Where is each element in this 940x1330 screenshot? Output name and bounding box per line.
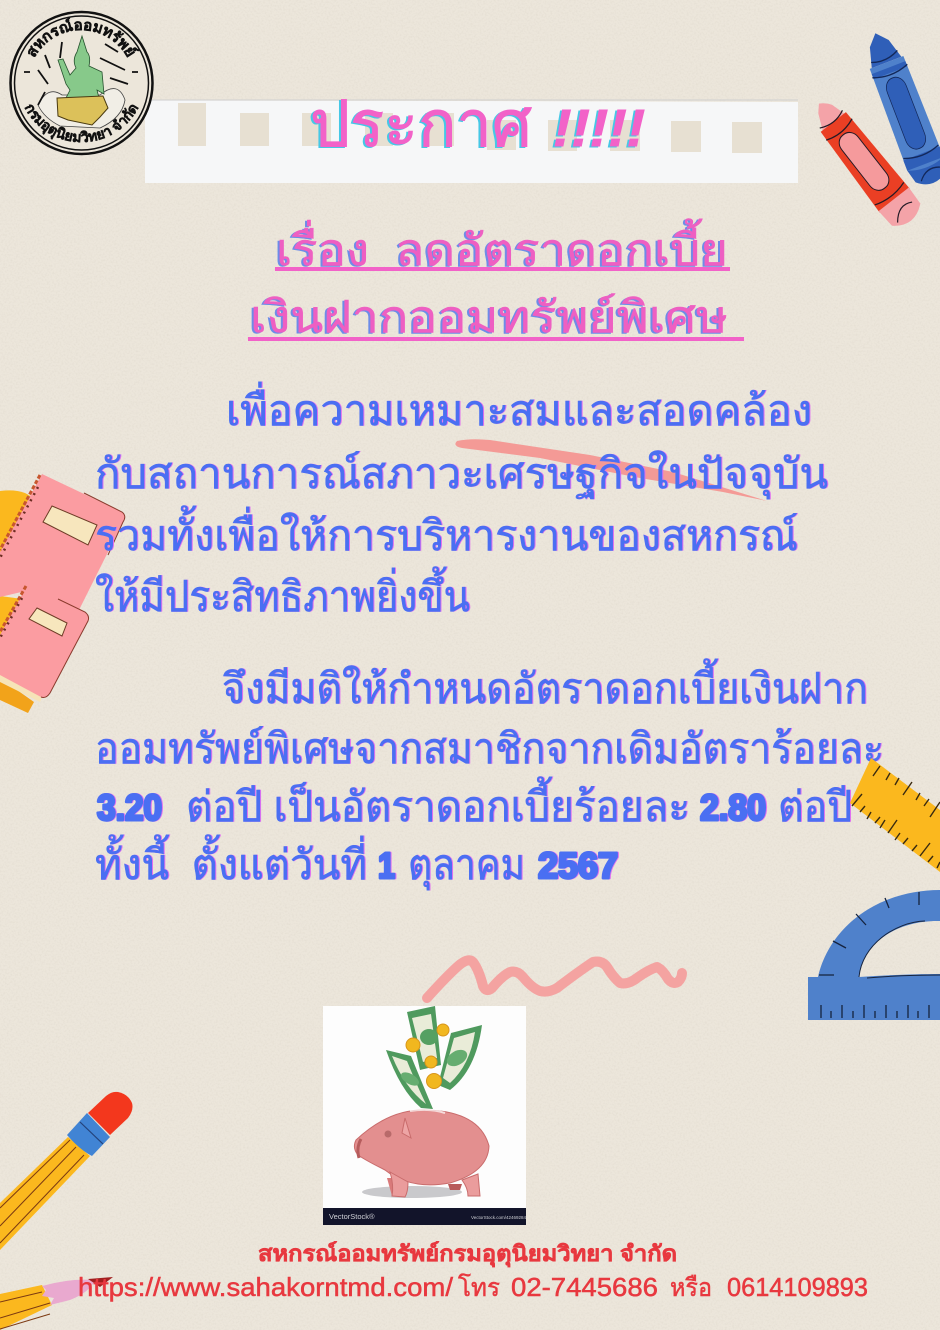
paragraph 1: เพื่อความเหมาะสมและสอดคล้อง (226, 382, 812, 434)
subtitle line 2: เงินฝากออมทรัพย์พิเศษ (250, 293, 728, 342)
piggy bank picture (323, 1006, 527, 1225)
footer contact: 0614109893 (727, 1272, 868, 1302)
title: ประกาศ (310, 88, 532, 160)
icon: red crayon (804, 92, 926, 233)
paragraph 2: 1 (378, 845, 395, 886)
footer contact: 02-7445686 (511, 1272, 658, 1302)
pig (354, 1110, 489, 1198)
logo figure (24, 36, 138, 128)
footer contact (78, 1241, 868, 1302)
coins (406, 1024, 449, 1088)
paragraph 1 (95, 382, 828, 620)
icon: yellow ruler (850, 758, 940, 872)
watermark bar: VectorStock® (329, 1212, 375, 1221)
footer contact: https://www.sahakorntmd.com/ (78, 1272, 454, 1302)
paragraph 2: จึงมีมติให้กำหนดอัตราดอกเบี้ยเงินฝาก (222, 658, 868, 712)
footer contact: โทร (458, 1273, 500, 1302)
icon: pink brush stroke behind text (455, 439, 767, 501)
paragraph 2: ต่อปี เป็นอัตราดอกเบี้ยร้อยละ (186, 776, 690, 830)
paragraph 2: ตุลาคม (408, 841, 525, 891)
title (310, 88, 645, 160)
torn white paper strip (145, 99, 798, 183)
paragraph 1: ให้มีประสิทธิภาพยิ่งขึ้น (95, 566, 470, 620)
icon: blue protractor (808, 890, 940, 1020)
icon: yellow pencil (0, 1092, 132, 1250)
paragraph 1: กับสถานการณ์สภาวะเศรษฐกิจในปัจจุบัน (95, 450, 828, 500)
paragraph 2: 3.20 (97, 787, 162, 828)
icon: blue crayon (857, 26, 940, 190)
paragraph 2 (95, 658, 884, 891)
paragraph 1: รวมทั้งเพื่อให้การบริหารงานของสหกรณ์ (95, 505, 798, 559)
icon: sharpened pencil (0, 1277, 113, 1330)
logo top text: สหกรณ์ออมทรัพย์ (28, 18, 140, 58)
paragraph 2: ต่อปี (778, 783, 852, 830)
icon: pink squiggle (427, 960, 682, 998)
watermark bar: VectorStock.com/42469284 (471, 1215, 527, 1220)
logo: cooperative seal (9, 10, 154, 156)
subtitle line 1: เรื่อง ลดอัตราดอกเบี้ย (276, 218, 728, 275)
icon: notebooks (0, 474, 125, 713)
title: !!!!! (553, 100, 645, 158)
footer contact: หรือ (670, 1274, 712, 1302)
banknotes (386, 1006, 482, 1109)
paragraph 2: ออมทรัพย์พิเศษจากสมาชิกจากเดิมอัตราร้อยละ (95, 725, 884, 772)
paragraph 2: 2567 (538, 845, 618, 886)
footer contact: สหกรณ์ออมทรัพย์กรมอุตุนิยมวิทยา จำกัด (258, 1241, 677, 1268)
paragraph 2: 2.80 (700, 787, 766, 828)
paragraph 2: ทั้งนี้ ตั้งแต่วันที่ (95, 834, 367, 888)
watermark bar (323, 1208, 527, 1225)
logo bottom text: กรมอุตุนิยมวิทยา จำกัด (24, 104, 139, 143)
subtitle heading (248, 218, 744, 342)
